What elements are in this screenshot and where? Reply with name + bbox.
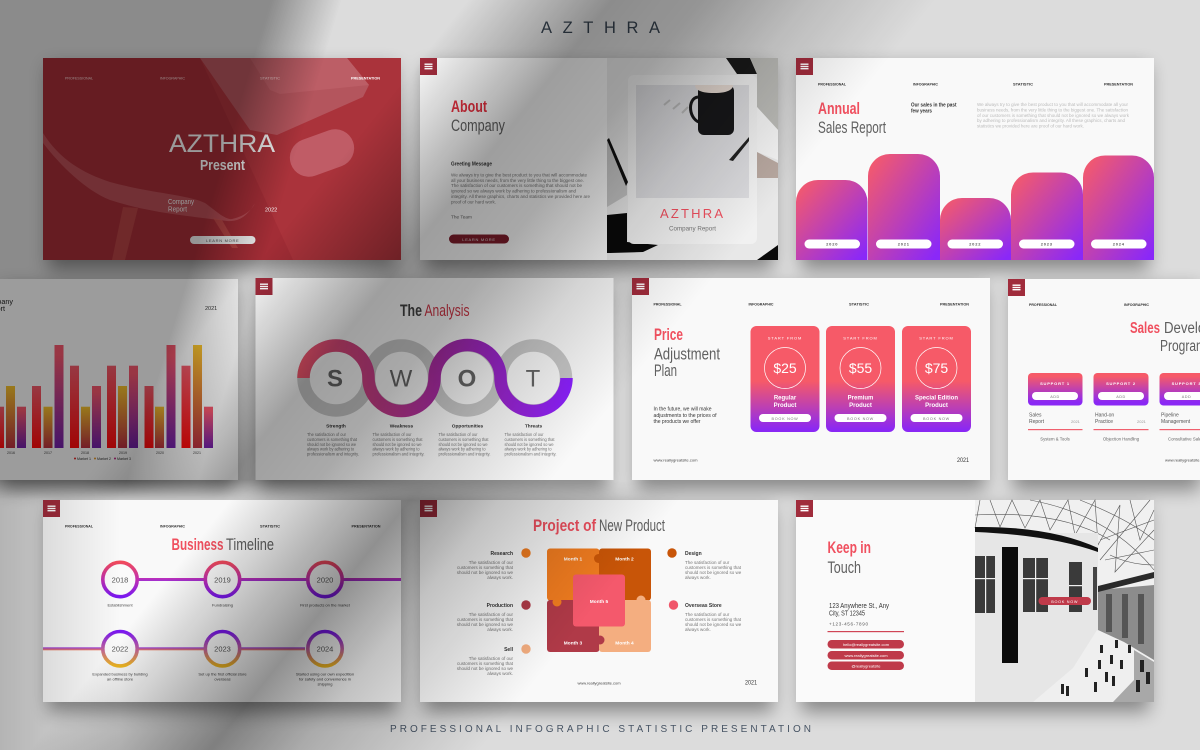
menu icon <box>1008 279 1025 296</box>
item: sell: Sell <box>504 647 514 653</box>
timeline row 1: First products on the market <box>300 602 351 608</box>
timeline row 1: Fundraising <box>212 602 233 608</box>
slide: annual sales report: few years <box>911 108 932 114</box>
item: design: Design <box>685 551 702 557</box>
timeline row 2: an offline store <box>107 676 134 682</box>
mouse <box>284 124 360 182</box>
item: overseas store: always work. <box>685 627 711 632</box>
price card: regular: Regular <box>774 396 797 402</box>
support card 2: Practice <box>1095 419 1113 425</box>
swot diagram: O <box>458 366 476 392</box>
body text: proof of our hard work. <box>451 199 496 204</box>
swot text: threats <box>504 432 556 456</box>
description: the products we offer <box>654 419 701 425</box>
slide: annual sales report: Sales Report <box>818 118 886 137</box>
slide: project of new product: New Product <box>599 516 665 535</box>
swot text: strength <box>307 432 359 456</box>
swot labels: Weakness <box>390 424 414 430</box>
support card 2: 2021 <box>1137 419 1147 424</box>
support card 3: Management <box>1161 419 1191 425</box>
price card: premium: $55 <box>849 360 872 376</box>
slide: swot analysis: Analysis <box>424 301 470 320</box>
item: production: Production <box>487 603 513 609</box>
swot text: weakness: The satisfaction of our <box>372 432 412 437</box>
swot diagram <box>304 345 566 411</box>
support card 1: SUPPORT 1 <box>1040 381 1070 386</box>
support card 1: 2021 <box>1071 419 1081 424</box>
swot diagram: S <box>327 366 343 392</box>
body text: ignored so we always work by adhering to professionalism and <box>451 189 576 194</box>
slide: cover: 2022 <box>265 208 277 214</box>
item: overseas store <box>669 600 742 632</box>
navigation: PROFESSIONAL <box>1029 302 1057 307</box>
navigation <box>654 302 969 306</box>
item: production: should not be ignored so we <box>457 622 513 627</box>
slide: market bar chart: 2021 <box>205 306 217 312</box>
slide: project of new product <box>420 500 778 702</box>
menu icon <box>632 278 649 295</box>
body text <box>451 172 590 204</box>
price card: premium: START FROM <box>843 336 878 340</box>
price card: special edition: START FROM <box>919 336 954 340</box>
axis labels: 2019 <box>119 451 127 455</box>
button: learn more: LEARN MORE <box>206 238 239 243</box>
price card: special edition: $75 <box>925 360 948 376</box>
slide: about company <box>420 58 778 260</box>
navigation <box>1029 302 1149 307</box>
swot diagram: W <box>390 366 413 392</box>
heading: Project of <box>533 516 596 535</box>
menu icon <box>796 500 813 517</box>
slide: business timeline <box>43 500 401 702</box>
timeline row 2: Started using our own expedition <box>296 672 354 676</box>
swot text: threats: professionalism and integrity. <box>504 452 556 456</box>
item: design: should not be ignored so we <box>685 570 742 575</box>
table surface <box>200 58 401 260</box>
item: production: always work. <box>487 627 513 632</box>
support card 3: Pipeline <box>1161 412 1179 418</box>
swot text: opportunities: always work by adhering to <box>438 446 486 452</box>
item: production: The satisfaction of our <box>469 612 513 617</box>
button: learn more <box>449 234 509 244</box>
timeline row 1: Establishment <box>107 602 133 608</box>
timeline row 1 <box>103 562 401 608</box>
timeline row 1: 2018 <box>112 575 128 584</box>
bar chart: yearly sales: 2023 <box>1041 242 1053 246</box>
description: In the future, we will make <box>654 406 712 412</box>
button: learn more <box>190 236 256 244</box>
address <box>829 603 889 618</box>
timeline row 2: shipping <box>318 682 332 686</box>
bar chart: yearly sales: 2022 <box>969 242 981 246</box>
body text: statistics we provided here are proof of our hard work. <box>977 123 1084 128</box>
item: design <box>667 548 742 580</box>
item: overseas store: The satisfaction of our <box>685 612 730 617</box>
item: production <box>457 600 531 632</box>
price card: regular: Product <box>774 403 796 409</box>
price card: premium: Product <box>849 403 872 409</box>
slide: keep in touch <box>796 500 1154 702</box>
body text: We always try to give the best product to you that will accommodate all your <box>977 102 1128 107</box>
address: City, ST 12345 <box>829 610 865 618</box>
navigation: INFOGRAPHIC <box>913 82 938 86</box>
bar chart: yearly sales: 2020 <box>826 242 838 246</box>
slide: cover <box>43 58 401 260</box>
timeline row 1: 2019 <box>214 575 231 584</box>
photo: museum rotunda <box>975 500 1154 702</box>
swot text: weakness: always work by adhering to <box>372 446 420 452</box>
timeline row 2: 2023 <box>214 644 231 654</box>
swot text: opportunities: customers is something that <box>438 437 489 442</box>
slide: cover: Present <box>200 157 245 174</box>
timeline row 2: overseas <box>214 676 231 682</box>
price card: premium: BOOK NOW <box>847 417 874 421</box>
support card 2: Objection Handling <box>1103 436 1140 442</box>
subheading: Our sales in the past <box>911 102 957 108</box>
slide: price plan: Plan <box>654 361 677 380</box>
slide: sales development program <box>1008 279 1200 480</box>
swot text: threats: The satisfaction of our <box>504 432 544 437</box>
navigation: PRESENTATION <box>1104 82 1133 86</box>
price card: premium: Premium <box>848 396 873 402</box>
axis labels: 2018 <box>81 451 89 455</box>
timeline row 2 <box>43 632 354 686</box>
support card 2 <box>1094 373 1148 442</box>
price card: special edition: Product <box>925 403 948 409</box>
slide: project of new product: 2021 <box>745 680 758 686</box>
body text: all your business needs, from the very little thing to the biggest one. <box>451 178 584 183</box>
slide: price plan: 2021 <box>957 458 970 464</box>
navigation: INFOGRAPHIC <box>1124 302 1149 307</box>
slide: about company: The Team <box>451 214 472 220</box>
menu icon <box>256 278 272 295</box>
contact pills: @reallygreatsite <box>852 663 881 668</box>
body text: We always try to give the best product to you that will accommodate <box>451 172 587 178</box>
navigation: PROFESSIONAL <box>654 302 682 306</box>
title: AZTHRA <box>541 19 660 37</box>
timeline row 2: Expanded business by building <box>92 672 148 676</box>
price card: regular: $25 <box>773 360 797 376</box>
item: overseas store: should not be ignored so we <box>685 622 742 627</box>
heading: Price <box>654 325 683 344</box>
swot text: strength: customers is something that <box>307 437 358 442</box>
puzzle diagram: Month 2 <box>615 556 634 562</box>
menu icon <box>420 500 437 517</box>
swot text: opportunities: should not be ignored so we <box>438 442 488 447</box>
price card: premium <box>826 326 895 432</box>
navigation <box>65 76 380 80</box>
navigation: PRESENTATION <box>351 76 380 80</box>
swot text: strength: professionalism and integrity. <box>307 452 359 456</box>
heading: Business <box>172 535 224 554</box>
item: sell: should not be ignored so we <box>457 666 513 671</box>
slide: business timeline: Timeline <box>226 535 274 554</box>
description <box>654 406 717 425</box>
support card 1: ADD <box>1050 395 1060 399</box>
swot text: weakness: customers is something that <box>372 437 423 442</box>
puzzle diagram: Month 5 <box>590 599 609 605</box>
bar chart: yearly sales: 2024 <box>1113 242 1125 246</box>
cover title: AZTHRA <box>169 130 275 158</box>
swot text: weakness <box>372 432 424 456</box>
slide: cover: Report <box>168 206 187 214</box>
price card: regular: START FROM <box>768 336 802 340</box>
price card: regular <box>750 326 820 432</box>
navigation <box>818 82 1133 86</box>
legend: Market 1 <box>77 457 91 461</box>
support card 1 <box>1028 373 1082 442</box>
axis labels <box>7 451 201 455</box>
heading: Annual <box>818 99 860 118</box>
item: sell: always work. <box>487 671 513 676</box>
menu icon <box>43 500 60 517</box>
timeline row 2: 2022 <box>112 644 128 654</box>
price card: special edition: Special Edition <box>915 396 958 402</box>
support card 1: Sales <box>1029 412 1042 418</box>
navigation: PROFESSIONAL <box>65 524 93 528</box>
timeline row 2: 2024 <box>317 644 333 654</box>
item: research: The satisfaction of our <box>469 560 513 565</box>
swot labels <box>326 424 542 430</box>
menu icon <box>420 58 437 75</box>
description: adjustments to the prices of <box>654 413 717 419</box>
footer: www.reallygreatsite.com <box>577 680 621 686</box>
phone: +123-456-7890 <box>829 622 868 626</box>
lighting overlay: lower row <box>0 483 652 750</box>
support card 2: ADD <box>1116 395 1126 399</box>
heading: About <box>451 97 487 116</box>
tagline: PROFESSIONAL INFOGRAPHIC STATISTIC PRESENTATION <box>390 724 811 735</box>
item: research: customers is something that <box>457 565 514 570</box>
puzzle diagram <box>547 548 651 652</box>
cover details: Company <box>168 199 194 206</box>
item: production: customers is something that <box>457 617 514 622</box>
support card 1: Report <box>1029 419 1045 425</box>
price card: regular: BOOK NOW <box>772 417 798 421</box>
navigation: STATISTIC <box>849 302 869 306</box>
item: overseas store: customers is something that <box>685 617 742 622</box>
axis labels: 2021 <box>193 451 201 455</box>
slide: price plan <box>632 278 990 480</box>
swot labels: Threats <box>525 424 542 430</box>
contact pills <box>828 640 904 670</box>
swot text: strength: should not be ignored so we <box>307 442 356 447</box>
navigation: PROFESSIONAL <box>65 76 94 80</box>
address: 123 Anywhere St., Any <box>829 603 889 610</box>
support card 2: Hand-on <box>1095 412 1114 418</box>
lighting overlay: upper rows <box>0 0 902 498</box>
laptop <box>200 58 369 135</box>
item: research <box>457 548 531 580</box>
slide: about company: Company <box>451 116 505 135</box>
navigation: PROFESSIONAL <box>818 82 846 86</box>
puzzle diagram: Month 3 <box>564 640 583 646</box>
support card 3: ADD <box>1182 395 1191 399</box>
navigation: STATISTIC <box>260 524 280 528</box>
slide: swot analysis <box>256 278 614 480</box>
slide: keep in touch: Touch <box>828 558 861 577</box>
greeting text: Greeting Message <box>451 162 492 168</box>
item: overseas store: Overseas Store <box>685 603 722 609</box>
item: design: The satisfaction of our <box>685 560 730 565</box>
legend: Market 2 <box>97 457 111 461</box>
slide: market bar chart <box>0 279 238 480</box>
axis labels: 2020 <box>156 451 164 455</box>
timeline row 2: for safety and convenience in <box>299 676 351 682</box>
swot text: weakness: should not be ignored so we <box>372 442 422 447</box>
body text: integrity. All these graphics, charts and statistics we provided here are <box>451 194 590 199</box>
navigation: INFOGRAPHIC <box>160 524 185 528</box>
brand: AZTHRA <box>660 206 723 221</box>
body text: business needs, from the very little thing to the biggest one. The satisfaction <box>977 107 1128 112</box>
heading: The <box>400 301 422 320</box>
swot text: threats: customers is something that <box>504 437 555 442</box>
item: design: customers is something that <box>685 565 742 570</box>
navigation: STATISTIC <box>1013 82 1033 86</box>
heading: Keep in <box>828 538 871 557</box>
item: research: should not be ignored so we <box>457 570 513 575</box>
swot text: opportunities: professionalism and integrity. <box>438 452 490 456</box>
navigation: STATISTIC <box>260 76 280 80</box>
axis labels: 2016 <box>7 451 15 455</box>
swot text: opportunities <box>438 432 490 456</box>
swot labels: Strength <box>326 424 346 430</box>
slide: annual sales report <box>796 58 1154 260</box>
contact pills: www.reallygreatsite.com <box>844 653 888 658</box>
navigation: INFOGRAPHIC <box>160 76 185 80</box>
swot diagram: T <box>526 366 541 392</box>
axis labels: 2017 <box>44 451 52 455</box>
item: design: always work. <box>685 575 711 580</box>
navigation: PRESENTATION <box>352 524 381 528</box>
body text: The satisfaction of our customers is something that should not be <box>451 183 582 188</box>
navigation: PRESENTATION <box>940 302 969 306</box>
body text <box>977 102 1130 128</box>
price card: special edition: BOOK NOW <box>923 417 950 421</box>
swot text: opportunities: The satisfaction of our <box>438 432 478 437</box>
legend: Market 3 <box>117 457 131 461</box>
item: sell <box>457 644 531 676</box>
support card 3 <box>1160 373 1200 442</box>
price card: special edition <box>902 326 971 432</box>
photo: desk with mug <box>607 58 778 260</box>
menu icon <box>796 58 813 75</box>
support card 1: System & Tools <box>1040 436 1070 442</box>
item: sell: The satisfaction of our <box>469 656 513 661</box>
slide: price plan: Adjustment <box>654 344 720 364</box>
swot text: threats: should not be ignored so we <box>504 442 554 447</box>
body text: by adhering to professionalism and integrity. All these graphics, charts and <box>977 118 1125 123</box>
puzzle diagram: Month 4 <box>615 640 634 646</box>
button: book now <box>1038 597 1091 605</box>
contact pills: hello@reallygreatsite.com <box>843 642 890 647</box>
support card 2: SUPPORT 2 <box>1106 381 1136 386</box>
legend <box>74 457 131 461</box>
swot text: strength: always work by adhering to <box>307 446 354 452</box>
footer: www.reallygreatsite.com <box>654 458 698 462</box>
item: sell: customers is something that <box>457 661 514 666</box>
chair <box>43 133 255 221</box>
slide: about company: Company Report <box>669 226 716 232</box>
bars <box>0 345 213 448</box>
puzzle diagram: Month 1 <box>564 556 583 562</box>
item: research: Research <box>490 551 513 557</box>
timeline row 1: 2020 <box>317 575 333 584</box>
timeline row 2: Set up the first official store <box>198 672 247 676</box>
swot text: weakness: professionalism and integrity. <box>372 452 424 456</box>
swot text: threats: always work by adhering to <box>504 446 552 452</box>
swot labels: Opportunities <box>452 424 484 430</box>
button: learn more: LEARN MORE <box>462 237 496 242</box>
heading: Sales <box>1130 320 1160 337</box>
item: research: always work. <box>487 575 513 580</box>
bar chart: yearly sales: 2021 <box>898 242 910 246</box>
navigation <box>65 524 381 528</box>
body text: of our customers is something that should not be ignored so we always work <box>977 113 1130 118</box>
button: book now: BOOK NOW <box>1051 600 1078 604</box>
navigation: INFOGRAPHIC <box>748 302 774 306</box>
swot text: strength: The satisfaction of our <box>307 432 346 437</box>
bar chart: yearly sales <box>796 154 1154 260</box>
